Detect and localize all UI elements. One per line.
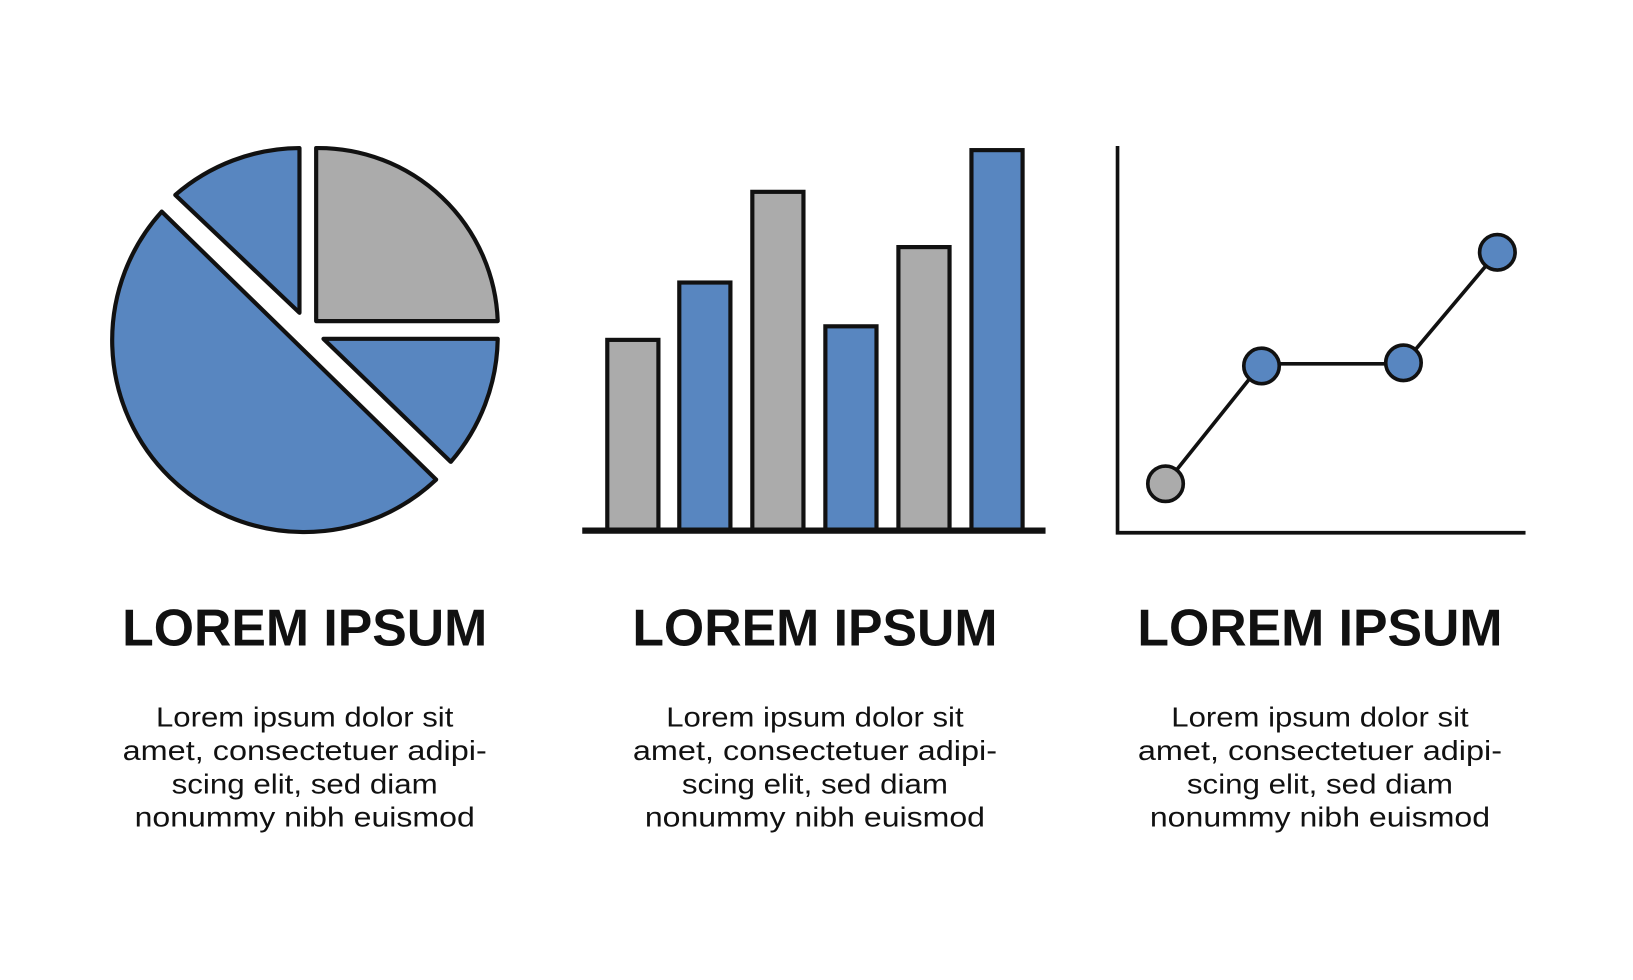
text column 3: nonummy nibh euismod [1150,802,1490,833]
text column 3: LOREM IPSUM [1137,599,1503,657]
line chart [1118,146,1526,533]
text column 2: LOREM IPSUM [632,599,998,657]
text column 2 [632,599,998,833]
text column 2: nonummy nibh euismod [645,802,985,833]
text column 2: Lorem ipsum dolor sit [666,702,964,733]
text column 2: amet, consectetuer adipi- [633,735,997,766]
text column 1: scing elit, sed diam [172,768,438,799]
text column 1: LOREM IPSUM [122,599,487,657]
text column 3 [1137,599,1503,833]
text column 1: Lorem ipsum dolor sit [156,702,454,733]
pie chart [112,148,498,532]
text column 3: amet, consectetuer adipi- [1138,735,1502,766]
text column 1: nonummy nibh euismod [135,802,475,833]
text column 1 [122,599,487,833]
text column 1: amet, consectetuer adipi- [123,735,487,766]
text column 3: Lorem ipsum dolor sit [1171,702,1469,733]
text column 3: scing elit, sed diam [1187,768,1453,799]
bar chart [582,150,1046,531]
text column 2: scing elit, sed diam [682,768,948,799]
